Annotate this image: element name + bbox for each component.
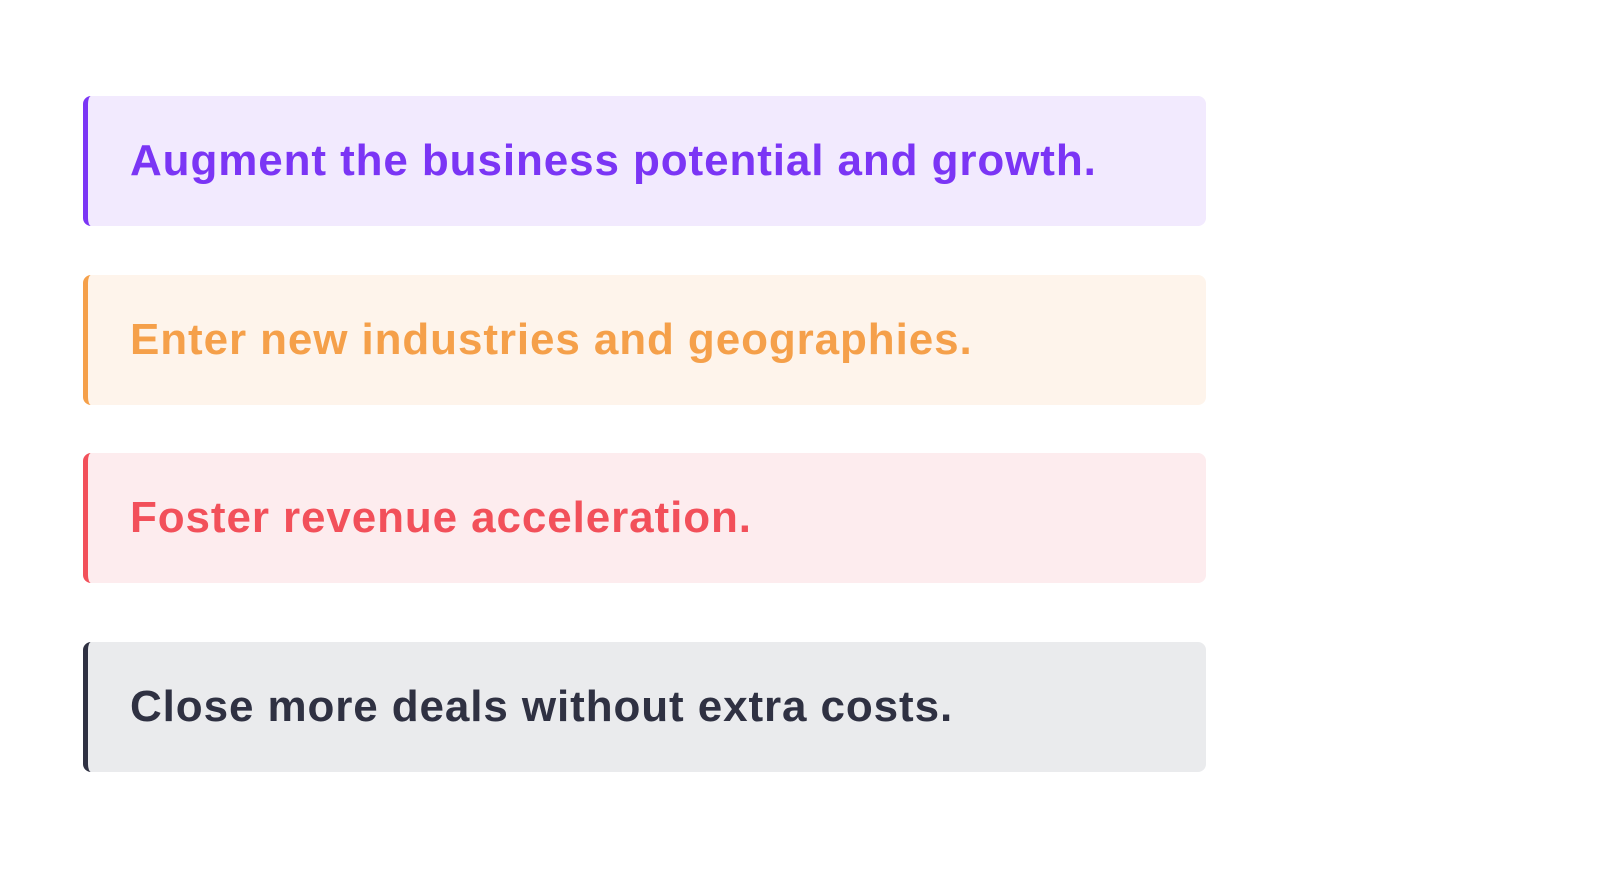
panel: foster [83, 453, 1206, 583]
panel: close [83, 642, 1206, 772]
panel: augment [83, 96, 1206, 226]
panel: enter: Enter new industries and geographies. [130, 315, 973, 364]
panel: foster: Foster revenue acceleration. [130, 493, 752, 542]
panel: augment: Augment the business potential and growth. [130, 136, 1097, 185]
panel: close: Close more deals without extra costs. [130, 682, 953, 731]
panel: enter [83, 275, 1206, 405]
